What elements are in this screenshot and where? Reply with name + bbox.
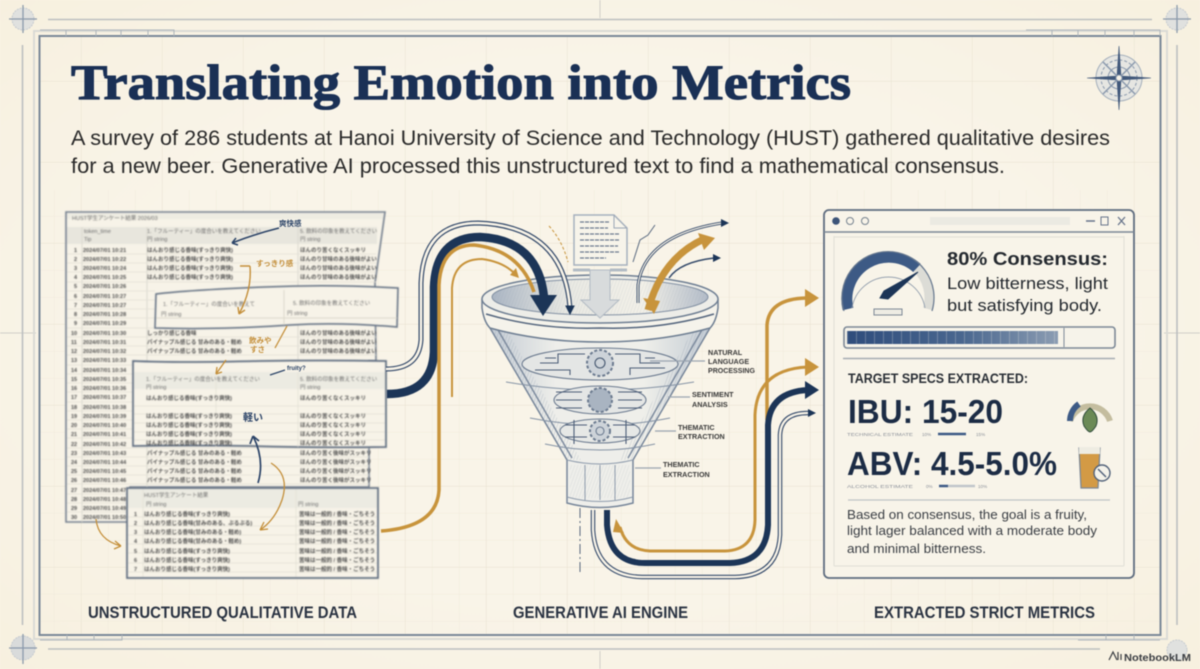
large table fragment: はんおり感じる香味(すっきり爽快) xyxy=(146,412,232,420)
consensus text xyxy=(947,248,1108,315)
bottom table fragment: はんおり感じる香味(甘みのある・軽め) xyxy=(144,537,241,545)
bottom table fragment: はんおり感じる香味(すっきり爽快) xyxy=(144,510,230,518)
large table fragment: はんおり感じる香味(すっきり爽快) xyxy=(146,430,232,438)
main survey spreadsheet: 2024/07/01 10:41 xyxy=(83,432,126,438)
consensus text: but satisfying body. xyxy=(947,296,1102,315)
main survey spreadsheet: パイナップル感じる 甘みのある・軽め xyxy=(147,467,242,475)
large table fragment: 円 string xyxy=(146,384,166,391)
main survey spreadsheet: 2024/07/01 10:49 xyxy=(83,506,126,512)
main survey spreadsheet: token_time xyxy=(84,229,111,235)
main survey spreadsheet: 2024/07/01 10:25 xyxy=(83,275,126,281)
main survey spreadsheet: 5. 飲料の印象を教えてください xyxy=(300,227,378,235)
funnel rim xyxy=(482,275,718,342)
main survey spreadsheet: 16 xyxy=(71,386,77,392)
captions xyxy=(88,603,1095,622)
gold top xyxy=(767,289,819,420)
bottom table fragment: 苦味は一般的 / 香味・ごちそう xyxy=(299,519,375,527)
large table fragment: 1.「フルーティー」の度合いを教えてください xyxy=(146,375,260,383)
large table fragment: ほんのり苦くなくスッキリ xyxy=(300,430,366,438)
intro text: A survey of 286 students at Hanoi University of Science and Technology (HUST) gathered qualitative desires xyxy=(71,127,1110,150)
bottom table fragment: 3 xyxy=(134,530,137,536)
title: Translating Emotion into Metrics xyxy=(71,54,851,110)
large table fragment: ほんのり苦くなくスッキリ xyxy=(300,439,366,447)
main survey spreadsheet: 18 xyxy=(71,405,77,411)
large table fragment: はんおり感じる香味(すっきり爽快) xyxy=(146,421,232,429)
intro text xyxy=(71,127,1110,178)
main survey spreadsheet: 2024/07/01 10:26 xyxy=(83,284,126,290)
main survey spreadsheet: ほんのり苦く後味がスッキリ xyxy=(300,458,372,466)
main survey spreadsheet: 3 xyxy=(74,266,77,272)
down arrow xyxy=(573,270,627,318)
panel: funnel xyxy=(381,215,755,575)
hop gauge icon xyxy=(1070,404,1110,432)
torn table strip: 5. 飲料の印象を教えてください xyxy=(293,299,371,307)
handwritten annotations: fruity? xyxy=(287,366,306,372)
ABV metric: 10% xyxy=(978,484,987,489)
gold return xyxy=(613,358,819,551)
outer double line arrow into funnel xyxy=(386,223,574,369)
bottom table fragment: はんおり感じる香味(すっきり爽快) xyxy=(144,547,230,555)
watermark: NotebookLM xyxy=(1124,652,1191,664)
funnel labels: EXTRACTION xyxy=(663,470,710,479)
bottom table fragment: 5 xyxy=(134,549,137,555)
main survey spreadsheet: 2024/07/01 10:32 xyxy=(83,349,126,355)
large table fragment: ほんのり苦くなくスッキリ xyxy=(300,412,366,420)
main survey spreadsheet: 2024/07/01 10:39 xyxy=(83,414,126,420)
main survey spreadsheet: 12 xyxy=(71,349,77,355)
main survey spreadsheet: 2024/07/01 10:38 xyxy=(83,405,126,411)
bottom table fragment: 1 xyxy=(134,512,137,518)
beer glass icon xyxy=(1079,447,1110,488)
main survey spreadsheet: 2024/07/01 10:42 xyxy=(83,442,126,448)
bottom table fragment: はんおり感じる香味(甘みのある・軽め) xyxy=(144,528,241,536)
funnel labels: EXTRACTION xyxy=(678,432,725,441)
main survey spreadsheet: 6 xyxy=(74,294,77,300)
funnel labels: THEMATIC xyxy=(663,460,700,469)
main survey spreadsheet: 2024/07/01 10:48 xyxy=(83,497,126,503)
bottom table fragment: 苦味は一般的 / 香味・ごちそう xyxy=(299,510,375,518)
main survey spreadsheet: 2024/07/01 10:27 xyxy=(83,303,126,309)
funnel labels: THEMATIC xyxy=(678,423,715,432)
main survey spreadsheet: ほんのり甘味のある後味がよい xyxy=(300,264,377,272)
main survey spreadsheet: 1.「フルーティー」の度合いを教えてください xyxy=(147,227,261,235)
captions: EXTRACTED STRICT METRICS xyxy=(874,603,1095,622)
bottom table fragment xyxy=(127,488,378,578)
main survey spreadsheet: 14 xyxy=(71,368,78,374)
main survey spreadsheet: 5 xyxy=(74,284,77,290)
main survey spreadsheet: 15 xyxy=(71,377,77,383)
main survey spreadsheet: 2024/07/01 10:37 xyxy=(83,395,126,401)
funnel cone xyxy=(490,328,710,508)
gauge icon xyxy=(842,252,934,315)
main survey spreadsheet: 23 xyxy=(71,451,77,457)
consensus text: 80% Consensus: xyxy=(947,248,1108,269)
specs heading: TARGET SPECS EXTRACTED: xyxy=(848,371,1028,386)
main survey spreadsheet: 19 xyxy=(71,414,77,420)
panel: unstructured qualitative data xyxy=(66,212,398,578)
main survey spreadsheet: 円 string xyxy=(300,236,320,243)
summary text: and minimal bitterness. xyxy=(847,542,986,556)
main survey spreadsheet: HUST学生アンケート結果 2026/03 xyxy=(72,214,158,222)
main survey spreadsheet: 13 xyxy=(71,358,77,364)
bottom table fragment: 苦味は一般的 / 香味・ごちそう xyxy=(299,565,375,573)
handwritten annotations: 軽い xyxy=(243,411,263,424)
funnel labels: NATURAL xyxy=(708,348,743,357)
funnel labels: PROCESSING xyxy=(708,366,755,375)
main survey spreadsheet: 2024/07/01 10:22 xyxy=(83,257,126,263)
main survey spreadsheet: 24 xyxy=(71,460,78,466)
main survey spreadsheet: 2024/07/01 10:27 xyxy=(83,294,126,300)
main survey spreadsheet: 22 xyxy=(71,442,77,448)
main survey spreadsheet: 2024/07/01 10:28 xyxy=(83,312,126,318)
main survey spreadsheet: 25 xyxy=(71,469,77,475)
bottom table fragment: はんおり感じる香味(甘みのある、ぶるぶる) xyxy=(144,519,252,527)
main survey spreadsheet: パイナップル感じる 甘みのある・軽め xyxy=(147,476,242,484)
consensus progress bar xyxy=(844,327,1115,348)
main survey spreadsheet: 2 xyxy=(74,257,77,263)
main survey spreadsheet: 2024/07/01 10:46 xyxy=(83,478,126,484)
center dash line xyxy=(579,508,581,575)
handwritten annotations: 飲みや xyxy=(249,335,272,345)
main survey spreadsheet: 2024/07/01 10:24 xyxy=(83,266,127,272)
main survey spreadsheet: 20 xyxy=(71,423,77,429)
main survey spreadsheet: 2024/07/01 10:30 xyxy=(83,331,126,337)
captions: UNSTRUCTURED QUALITATIVE DATA xyxy=(88,603,357,622)
ABV metric: ALCOHOL ESTIMATE xyxy=(847,484,913,489)
funnel bands and gears xyxy=(506,348,694,450)
consensus text: Low bitterness, light xyxy=(947,274,1108,293)
window controls xyxy=(832,217,1125,225)
main survey spreadsheet: 30 xyxy=(71,515,77,521)
main survey spreadsheet: 2024/07/01 10:50 xyxy=(83,515,126,521)
funnel labels: LANGUAGE xyxy=(708,357,749,366)
main survey spreadsheet: 17 xyxy=(71,395,77,401)
torn table strip: 円 string xyxy=(161,311,181,318)
main survey spreadsheet: パイナップル感じる 甘みのある・軽め xyxy=(147,347,242,355)
main survey spreadsheet: 9 xyxy=(74,321,77,327)
intro text: for a new beer. Generative AI processed this unstructured text to find a mathematical consensus. xyxy=(71,155,1005,178)
main survey spreadsheet: パイナップル感じる 甘みのある・軽め xyxy=(147,449,242,457)
thick navy arrow into funnel xyxy=(387,237,557,394)
main survey spreadsheet xyxy=(66,212,385,522)
main survey spreadsheet: 2024/07/01 10:35 xyxy=(83,377,126,383)
IBU metric: IBU: 15-20 xyxy=(848,393,1003,430)
main survey spreadsheet: 4 xyxy=(74,275,78,281)
main survey spreadsheet: ほんのり苦く後味がスッキリ xyxy=(300,476,372,484)
main survey spreadsheet: 27 xyxy=(71,488,77,494)
summary text xyxy=(847,508,1098,556)
main survey spreadsheet: 2024/07/01 10:36 xyxy=(83,386,126,392)
handwritten annotations: すっきり感 xyxy=(256,258,294,268)
bottom table fragment: 2 xyxy=(134,521,137,527)
thick navy xyxy=(607,381,819,563)
main survey spreadsheet: 2024/07/01 10:34 xyxy=(83,368,127,374)
main survey spreadsheet: 1 xyxy=(74,248,77,254)
arrows out of funnel xyxy=(593,289,819,577)
gold out arrow xyxy=(643,233,715,314)
main survey spreadsheet: 2024/07/01 10:40 xyxy=(83,423,126,429)
main survey spreadsheet: ほんのり甘味のある後味がよい xyxy=(300,338,377,346)
bottom table fragment: 苦味は一般的 / 香味・ごちそう xyxy=(299,556,375,564)
funnel labels xyxy=(635,348,755,479)
ABV metric: 0% xyxy=(926,484,933,489)
bottom table fragment: 4 xyxy=(134,539,138,545)
thin out arrows xyxy=(549,219,729,303)
summary text: Based on consensus, the goal is a fruity, xyxy=(847,508,1087,522)
compass icon xyxy=(1087,46,1151,110)
large table fragment: はんおり感じる香味(すっきり爽快) xyxy=(146,439,232,447)
main survey spreadsheet: 円 string xyxy=(147,236,167,243)
bottom table fragment: はんおり感じる香味(すっきり爽快) xyxy=(144,556,230,564)
large table fragment: 円 string xyxy=(300,384,320,391)
main survey spreadsheet: 2024/07/01 10:33 xyxy=(83,358,126,364)
bottom table fragment: 苦味は一般的 / 香味・ごちそう xyxy=(299,537,375,545)
large table fragment: はんおり感じる香味(すっきり爽快) xyxy=(146,394,232,402)
panel: extracted metrics window xyxy=(824,210,1134,578)
bottom table fragment: 円 string xyxy=(298,501,318,508)
main survey spreadsheet: 2024/07/01 10:44 xyxy=(83,460,127,466)
main survey spreadsheet: 21 xyxy=(71,432,77,438)
summary text: light lager balanced with a moderate body xyxy=(847,524,1098,538)
handwritten annotations: 爽快感 xyxy=(279,218,302,228)
handwritten annotations: すさ xyxy=(250,345,265,354)
IBU metric: 15% xyxy=(976,432,985,437)
main survey spreadsheet: 29 xyxy=(71,506,77,512)
main survey spreadsheet: 2024/07/01 10:31 xyxy=(83,340,126,346)
bottom table fragment: 苦味は一般的 / 香味・ごちそう xyxy=(299,528,375,536)
large table fragment: ほんのり苦くなくスッキリ xyxy=(300,421,366,429)
main survey spreadsheet: 8 xyxy=(74,312,77,318)
main survey spreadsheet: ほんのり甘味のある後味がよい xyxy=(300,255,377,263)
handwritten annotations xyxy=(96,218,306,549)
main survey spreadsheet: 2024/07/01 10:45 xyxy=(83,469,126,475)
captions: GENERATIVE AI ENGINE xyxy=(513,603,688,622)
gold arrows into funnel xyxy=(381,245,534,531)
main survey spreadsheet: ほんのり苦く後味がスッキリ xyxy=(300,467,372,475)
bottom table fragment: 円 string xyxy=(146,501,166,508)
main survey spreadsheet: Tip xyxy=(84,237,91,243)
main survey spreadsheet: ほんのり甘味のある後味がよい xyxy=(300,329,377,337)
outer double line xyxy=(593,409,816,577)
main survey spreadsheet: パイナップル感じる 甘みのある・軽め xyxy=(147,458,242,466)
document icon xyxy=(574,215,627,265)
torn table strip: 円 string xyxy=(287,310,307,317)
bottom table fragment: はんおり感じる香味(すっきり爽快) xyxy=(144,565,230,573)
funnel labels: SENTIMENT xyxy=(692,390,734,399)
IBU metric: TECHNICAL ESTIMATE xyxy=(847,432,913,437)
main survey spreadsheet: 11 xyxy=(71,340,77,346)
main survey spreadsheet: はんおり感じる香味(すっきり爽快) xyxy=(147,255,233,263)
torn table strip: 1.「フルーティー」の度合いを教えて xyxy=(163,300,255,308)
main survey spreadsheet: パイナップル感じる 甘みのある・軽め xyxy=(147,338,242,346)
funnel labels: ANALYSIS xyxy=(692,400,728,409)
main survey spreadsheet: はんおり感じる香味(すっきり爽快) xyxy=(147,246,233,254)
main survey spreadsheet: 26 xyxy=(71,478,77,484)
main survey spreadsheet: しっかり感じる香味 xyxy=(147,329,197,337)
main survey spreadsheet: 2024/07/01 10:29 xyxy=(83,321,126,327)
main survey spreadsheet: 10 xyxy=(71,331,77,337)
main survey spreadsheet: 2024/07/01 10:43 xyxy=(83,451,126,457)
large table fragment: 5. 飲料の印象を教えてください xyxy=(300,375,378,383)
large table fragment: ほんのり苦くなくスッキリ xyxy=(300,394,366,402)
large table fragment xyxy=(133,360,386,447)
ABV metric: ABV: 4.5-5.0% xyxy=(847,445,1057,482)
main survey spreadsheet: 2024/07/01 10:47 xyxy=(83,488,126,494)
main survey spreadsheet: ほんのり苦く後味がスッキリ xyxy=(300,449,372,457)
bottom table fragment: 苦味は一般的 / 香味・ごちそう xyxy=(299,547,375,555)
torn table strip xyxy=(155,286,398,329)
main survey spreadsheet: ほんのり苦くなくスッキリ xyxy=(300,246,366,254)
bottom table fragment: HUST学生アンケート結果 xyxy=(144,491,209,499)
bottom table fragment: 7 xyxy=(134,567,137,573)
bottom table fragment: 6 xyxy=(134,558,137,564)
main survey spreadsheet: はんおり感じる香味(すっきり爽快) xyxy=(147,273,233,281)
main survey spreadsheet: 2024/07/01 10:21 xyxy=(83,248,126,254)
main survey spreadsheet: 28 xyxy=(71,497,77,503)
main survey spreadsheet: はんおり感じる香味(すっきり爽快) xyxy=(147,264,233,272)
IBU metric: 10% xyxy=(922,432,931,437)
main survey spreadsheet: 7 xyxy=(74,303,77,309)
main survey spreadsheet: ほんのり甘味のある後味がよい xyxy=(300,347,377,355)
main survey spreadsheet: ほんのり甘味のある後味がよい xyxy=(300,273,377,281)
